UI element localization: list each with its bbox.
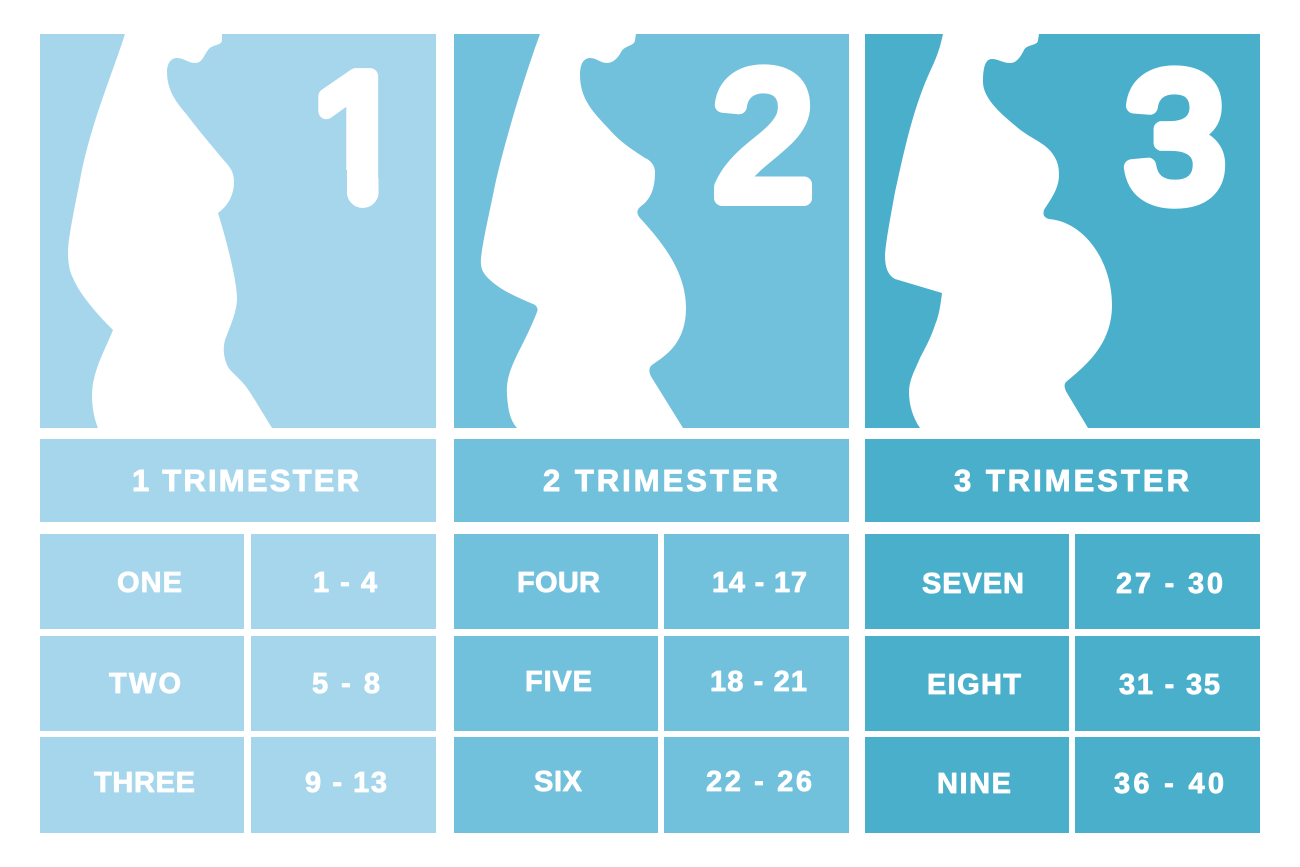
table: months and weeks, first trimester: ONE [117,567,182,599]
icon: pregnant silhouette, first trimester [68,34,272,428]
table: months and weeks, second trimester [454,534,849,833]
table: months and weeks, second trimester: FOUR [517,567,600,599]
table: months and weeks, third trimester: SEVEN [922,568,1024,600]
panel: second trimester [454,34,849,833]
table: months and weeks, first trimester [40,534,436,833]
panel: third trimester [865,34,1260,833]
large number 2: 2 [713,36,813,237]
table: months and weeks, third trimester: 27 - 30 [1116,568,1223,600]
table: months and weeks, first trimester: 5 - 8 [312,668,380,700]
icon: pregnant silhouette, second trimester [481,34,686,428]
large number 1: 1 [309,38,409,239]
illustration panel 1 background [40,34,436,428]
illustration panel 3 background [865,34,1260,428]
illustration panel 2 background [454,34,849,428]
heading: 3 trimester: 3 TRIMESTER [954,463,1189,498]
heading: 2 trimester [454,439,849,522]
table: months and weeks, second trimester: 14 - 17 [712,567,807,599]
icon: pregnant silhouette, third trimester [885,34,1112,428]
table: months and weeks, second trimester: FIVE [525,666,592,698]
large number 3: 3 [1125,37,1225,238]
heading: 3 trimester [865,439,1260,522]
table: months and weeks, third trimester: EIGHT [927,669,1021,701]
table: months and weeks, third trimester [865,534,1260,833]
table: months and weeks, second trimester: 22 - 26 [706,766,812,798]
heading: 1 trimester: 1 TRIMESTER [132,463,359,498]
table: months and weeks, second trimester: SIX [534,766,583,798]
table: months and weeks, first trimester: THREE [94,767,195,799]
table: months and weeks, second trimester: 18 - 21 [710,666,807,698]
table: months and weeks, first trimester: 1 - 4 [313,567,377,599]
table: months and weeks, third trimester: NINE [937,768,1011,800]
table: months and weeks, third trimester: 31 - 35 [1119,669,1220,701]
heading: 2 trimester: 2 TRIMESTER [543,463,778,498]
table: months and weeks, first trimester: TWO [109,668,181,700]
table: months and weeks, third trimester: 36 - 40 [1114,768,1224,800]
table: months and weeks, first trimester: 9 - 13 [305,767,387,799]
heading: 1 trimester [40,439,436,522]
panel: first trimester [40,34,436,833]
